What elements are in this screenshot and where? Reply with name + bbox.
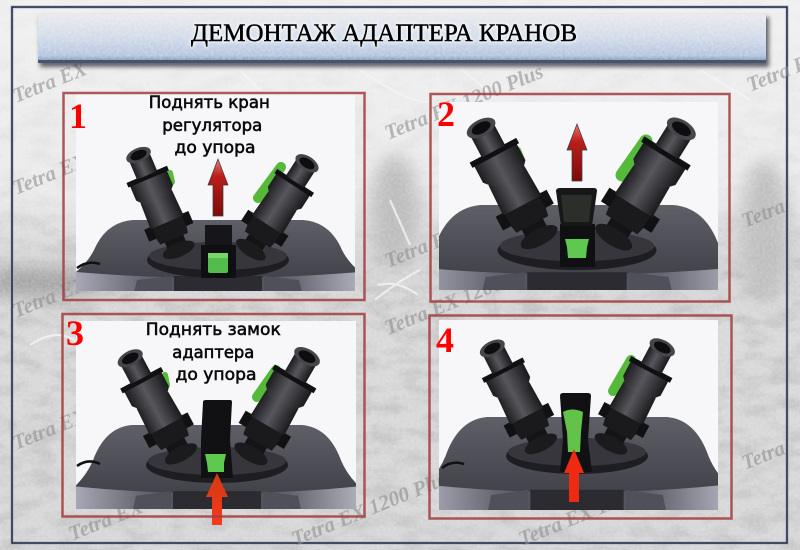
watermarks: Tetra [738,194,788,233]
watermarks: Tetra EX [9,56,91,108]
watermarks: Tetra EX 1200 Plus [288,465,454,550]
panel 1 instruction: Поднять кран [149,93,270,113]
watermarks: Tetra [738,436,788,475]
watermarks: Tetra EX 1200 Plus [381,187,547,273]
panel 4 photo background [439,320,718,510]
panel 2 number: 2 [437,94,455,134]
panel 3 frame [62,314,364,516]
panel 1 arrow [208,159,228,216]
panel 4 arrow [564,449,584,502]
title banner [38,14,769,67]
panel 1 device [76,139,360,292]
panel 2 device [439,118,718,290]
panel 1 frame [64,93,364,300]
watermarks: Tetra EX 1200 Plus [381,254,547,340]
watermarks: Tetra EX 1200 Plus [515,465,681,550]
title: ДЕМОНТАЖ АДАПТЕРА КРАНОВ [191,20,577,47]
panel 4 device [439,338,718,510]
panel 1 photo background [76,92,355,291]
watermarks: Tetra EX [9,271,91,323]
title banner: ДЕМОНТАЖ АДАПТЕРА КРАНОВ [191,20,577,47]
panel 4 frame [430,316,732,518]
panel 3 arrow [206,473,228,525]
panel 1: raise the regulator tap [64,92,364,300]
panel 3 instruction: Поднять замок [146,320,281,340]
panel 1 instruction: до упора [174,138,256,158]
panel 4: lock raised [426,316,732,518]
watermarks: Tetra EX [9,148,91,200]
watermarks: Tetra EX [9,403,91,455]
panel 3 instruction: адаптера [172,343,254,363]
watermarks: Tetra EX 1200 Plus [381,59,547,145]
panel 3 photo background [76,321,356,509]
panel 3 instruction: до упора [176,365,256,385]
panel 1 number: 1 [69,96,87,136]
panel 2 frame [430,94,730,302]
panel 2 photo background [439,102,718,290]
panel 3 number: 3 [66,313,84,353]
panel 2 arrow [567,124,587,181]
panel 3 device [75,337,359,510]
watermarks: Tetra EX [65,494,147,546]
panel 2: tap lifted [417,94,737,302]
panel 4 number: 4 [436,320,454,360]
panel 3: raise the adapter lock [62,313,364,525]
panel 1 instruction: регулятора [162,116,262,136]
